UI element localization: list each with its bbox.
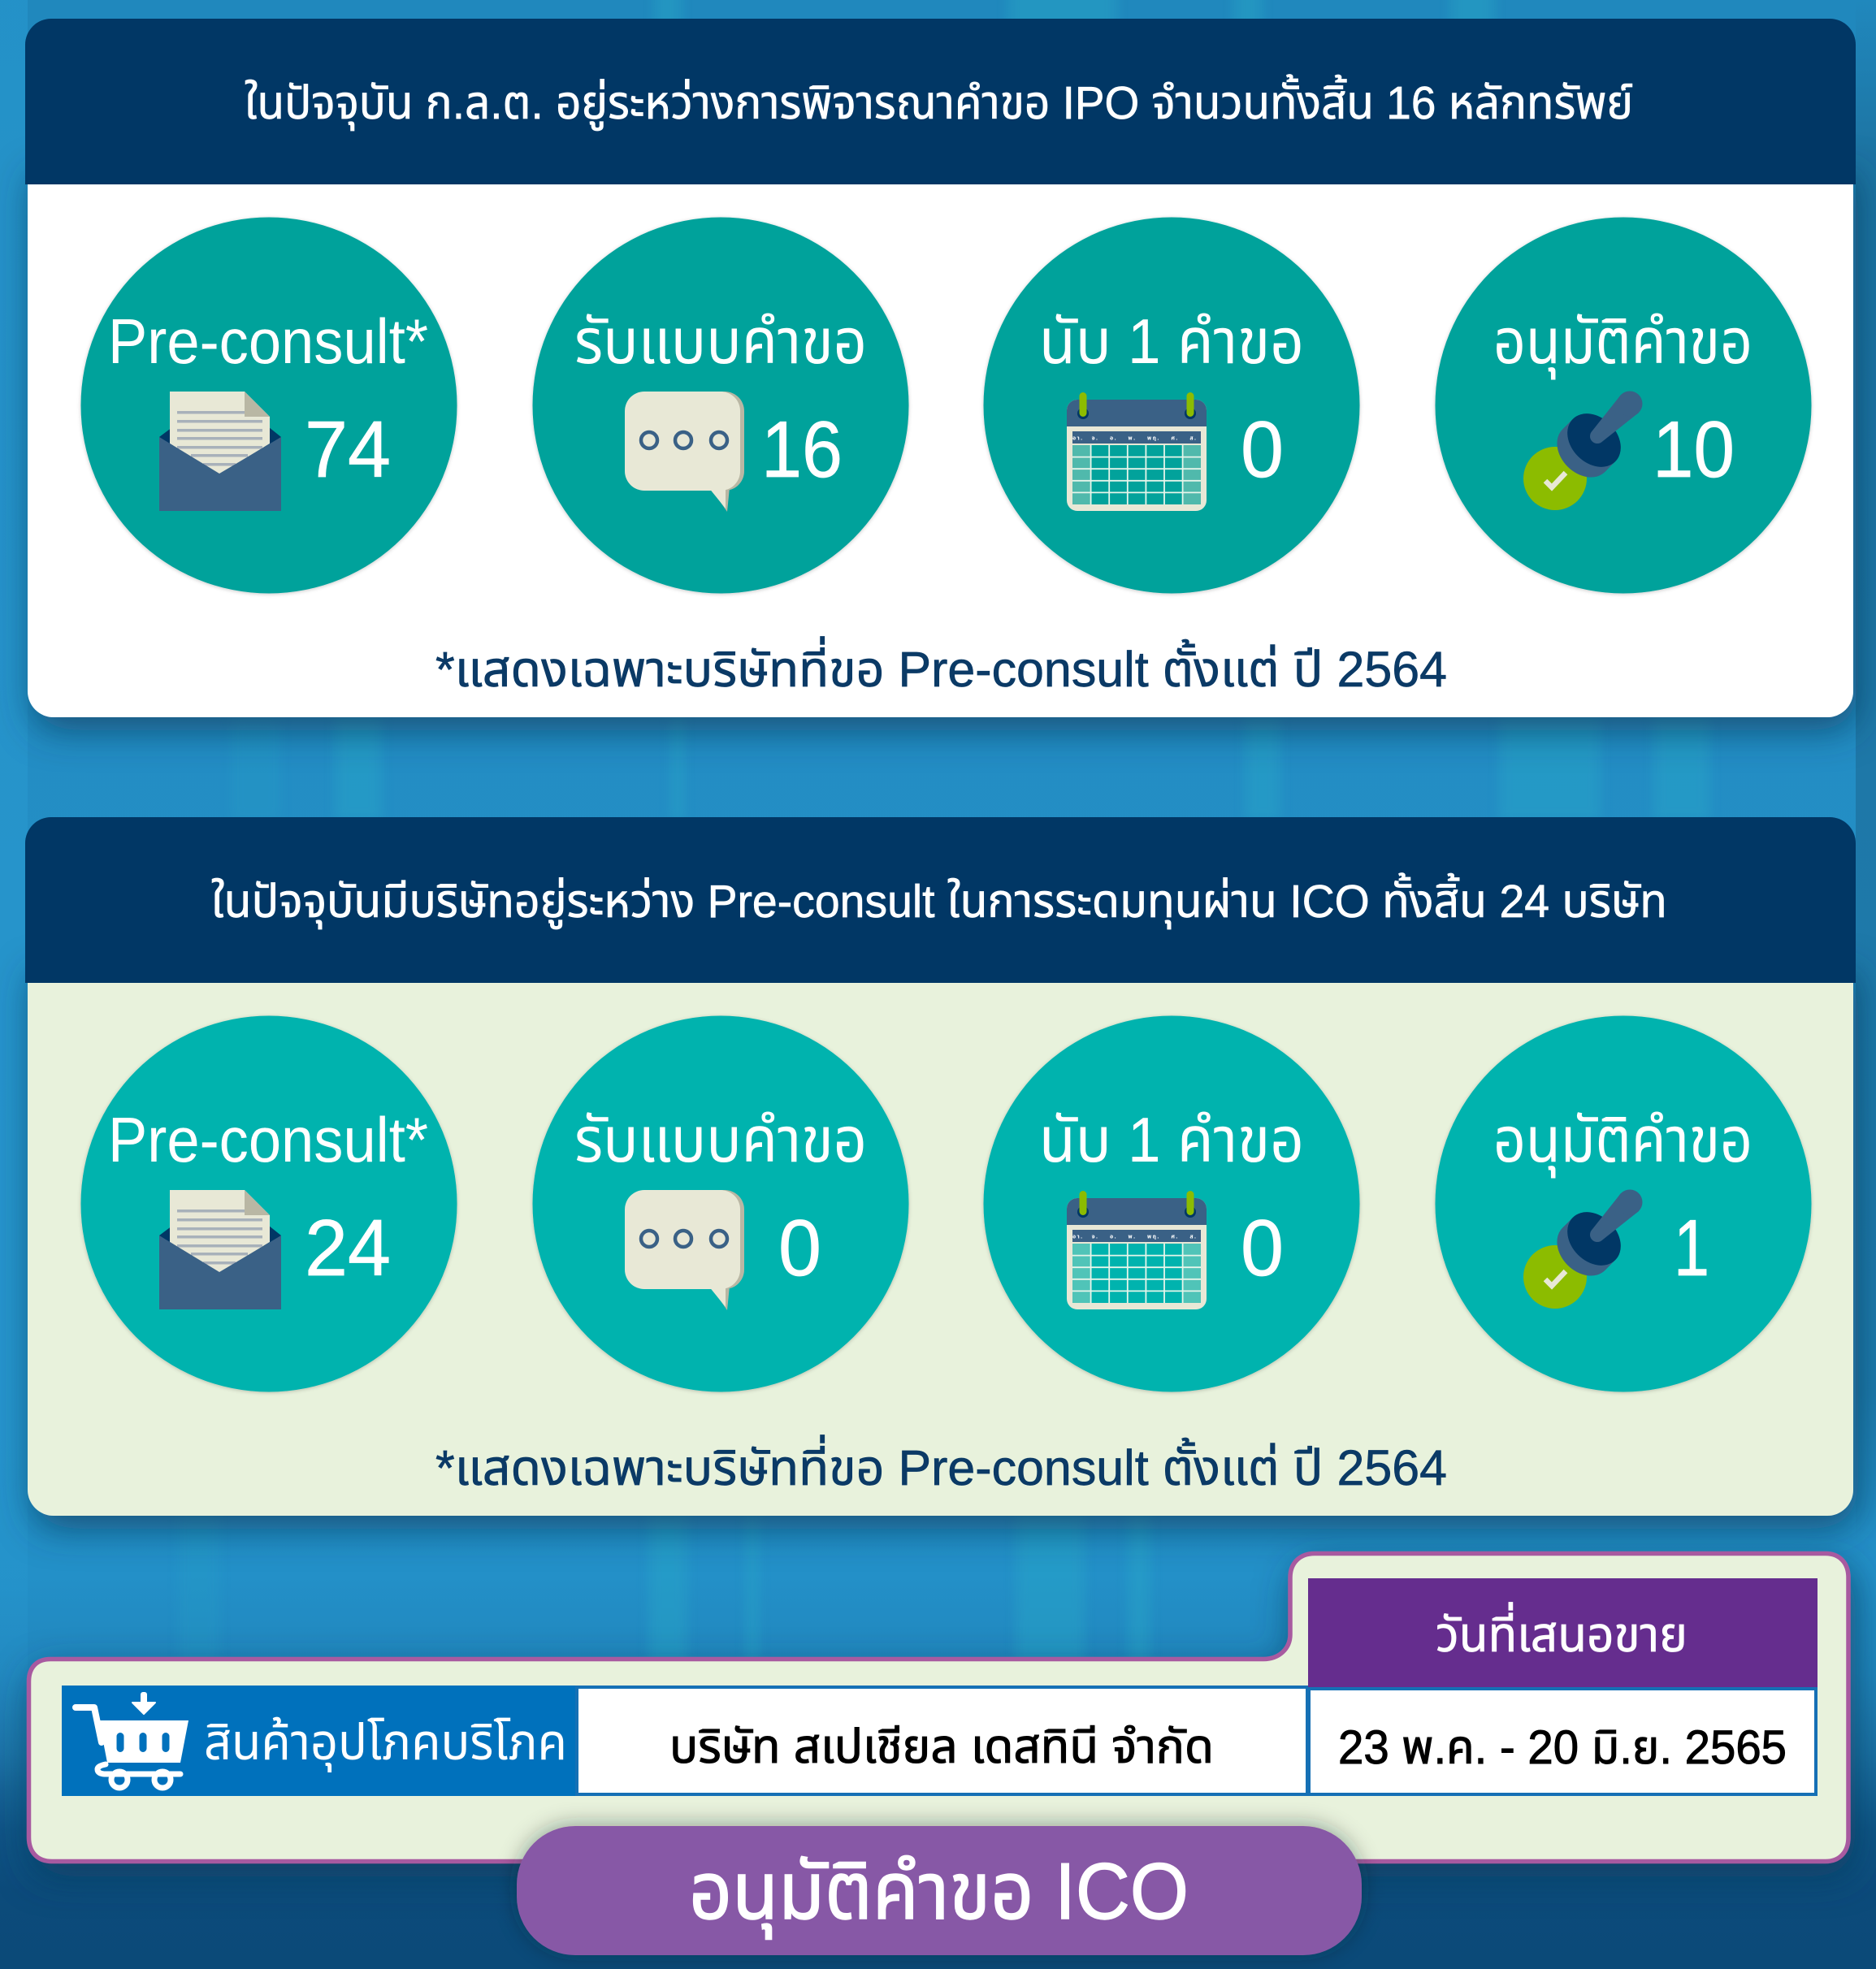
circle: form received 16 — [533, 218, 908, 593]
icon: envelope — [159, 1190, 281, 1309]
circle: count 1 filing 0 — [983, 218, 1360, 593]
circle: approved 10: 10 — [1653, 405, 1735, 494]
circle: form received 0 — [533, 1015, 908, 1392]
icon: speech bubble — [625, 392, 744, 512]
icon: stamp — [1523, 392, 1643, 510]
icon: shopping cart — [76, 1692, 188, 1788]
footnote: ICO: *แสดงเฉพาะบริษัทที่ขอ Pre-consult ตั้งแต่ ปี 2564 — [435, 1435, 1447, 1495]
table header: offering date: วันที่เสนอขาย — [1436, 1602, 1688, 1662]
circle: Pre-consult 24: 24 — [305, 1203, 391, 1292]
title pill — [517, 1826, 1362, 1955]
card body: ICO — [28, 961, 1853, 1516]
circle: form received 16: รับแบบคำขอ — [574, 305, 867, 377]
card body: IPO — [28, 162, 1853, 717]
table cell: company — [577, 1687, 1307, 1794]
icon: calendar — [1067, 1191, 1207, 1309]
circle: Pre-consult 74: 74 — [305, 405, 391, 494]
circle: form received 0: 0 — [778, 1203, 821, 1292]
circle: approved 10: อนุมัติคำขอ — [1493, 305, 1753, 380]
icon: calendar: อา. จ. อ. พ. พฤ. ศ. ส. — [1072, 435, 1196, 442]
circle: approved 10 — [1435, 218, 1812, 593]
circle: count 1 filing 0 — [983, 1015, 1360, 1392]
tabbed panel frame — [29, 1553, 1848, 1862]
table cell: date: 23 พ.ค. - 20 มิ.ย. 2565 — [1338, 1721, 1787, 1774]
table cell: company: บริษัท สเปเชียล เดสทินี จำกัด — [669, 1720, 1214, 1773]
icon: speech bubble — [625, 1190, 744, 1310]
circle: approved 1: อนุมัติคำขอ — [1493, 1104, 1753, 1179]
circle: form received 0: รับแบบคำขอ — [574, 1104, 867, 1175]
circle: count 1 filing 0: 0 — [1241, 405, 1284, 494]
circle: approved 1 — [1435, 1015, 1812, 1392]
circle: Pre-consult 24: Pre-consult* — [108, 1104, 428, 1175]
table cell: category: สินค้าอุปโภคบริโภค — [204, 1715, 567, 1772]
circle: count 1 filing 0: นับ 1 คำขอ — [1039, 1104, 1304, 1175]
table cell: date — [1309, 1689, 1816, 1794]
header bar: IPO: ในปัจจุบัน ก.ล.ต. อยู่ระหว่างการพิจารณาคำขอ IPO จำนวนทั้งสิ้น 16 หลักทรัพย์ — [245, 74, 1633, 131]
footnote: IPO: *แสดงเฉพาะบริษัทที่ขอ Pre-consult ตั้งแต่ ปี 2564 — [435, 636, 1447, 697]
header bar: ICO: ในปัจจุบันมีบริษัทอยู่ระหว่าง Pre-consult ในการระดมทุนผ่าน ICO ทั้งสิ้น 24 บริษัท — [211, 872, 1667, 929]
circle: count 1 filing 0: นับ 1 คำขอ — [1039, 305, 1304, 377]
circle: Pre-consult 74: Pre-consult* — [108, 305, 428, 377]
icon: calendar: อา. จ. อ. พ. พฤ. ศ. ส. — [1072, 1235, 1196, 1240]
icon: stamp — [1523, 1189, 1643, 1309]
table cell: category — [62, 1686, 577, 1796]
icon: calendar — [1067, 392, 1207, 511]
title pill: อนุมัติคำขอ ICO — [689, 1846, 1189, 1940]
header bar: ICO — [25, 817, 1856, 983]
circle: Pre-consult 24 — [81, 1015, 457, 1392]
panel: approved ICO table — [29, 1553, 1848, 1955]
circle: Pre-consult 74 — [81, 218, 457, 593]
header bar: IPO — [25, 19, 1856, 184]
circle: count 1 filing 0: 0 — [1241, 1203, 1284, 1292]
icon: envelope — [159, 392, 281, 511]
panel: ICO — [25, 817, 1856, 1516]
panel: IPO — [25, 19, 1856, 717]
table header: offering date — [1308, 1578, 1818, 1689]
circle: form received 16: 16 — [761, 405, 843, 494]
circle: approved 1: 1 — [1674, 1203, 1709, 1292]
